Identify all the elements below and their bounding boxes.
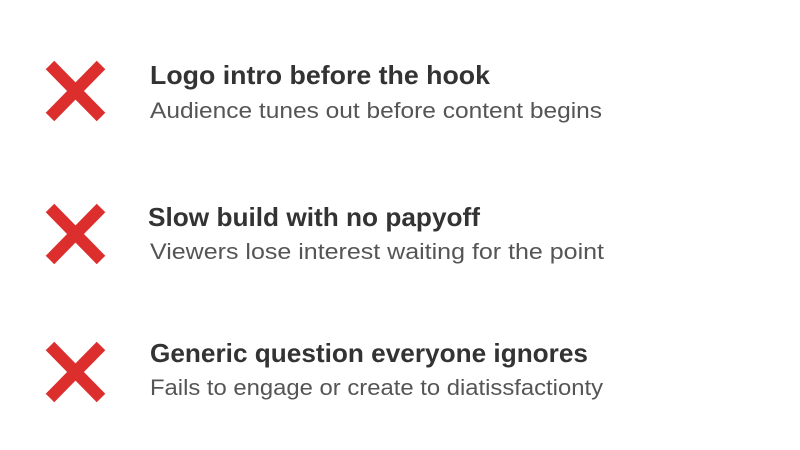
- icon: red x: [50, 208, 101, 260]
- row 3: [50, 338, 603, 400]
- text: audience tunes out: Audience tunes out before content begins: [150, 98, 602, 123]
- heading: logo intro: Logo intro before the hook: [150, 60, 491, 90]
- row 1: [50, 60, 602, 123]
- icon: red x: [50, 65, 101, 117]
- heading: slow build: Slow build with no papyoff: [148, 202, 480, 232]
- icon: red x: [50, 346, 101, 398]
- heading: generic question: Generic question everyone ignores: [150, 338, 588, 368]
- row 2: [50, 202, 604, 264]
- text: viewers lose interest: Viewers lose interest waiting for the point: [150, 239, 604, 264]
- text: fails to engage: Fails to engage or create to diatissfactionty: [150, 375, 603, 400]
